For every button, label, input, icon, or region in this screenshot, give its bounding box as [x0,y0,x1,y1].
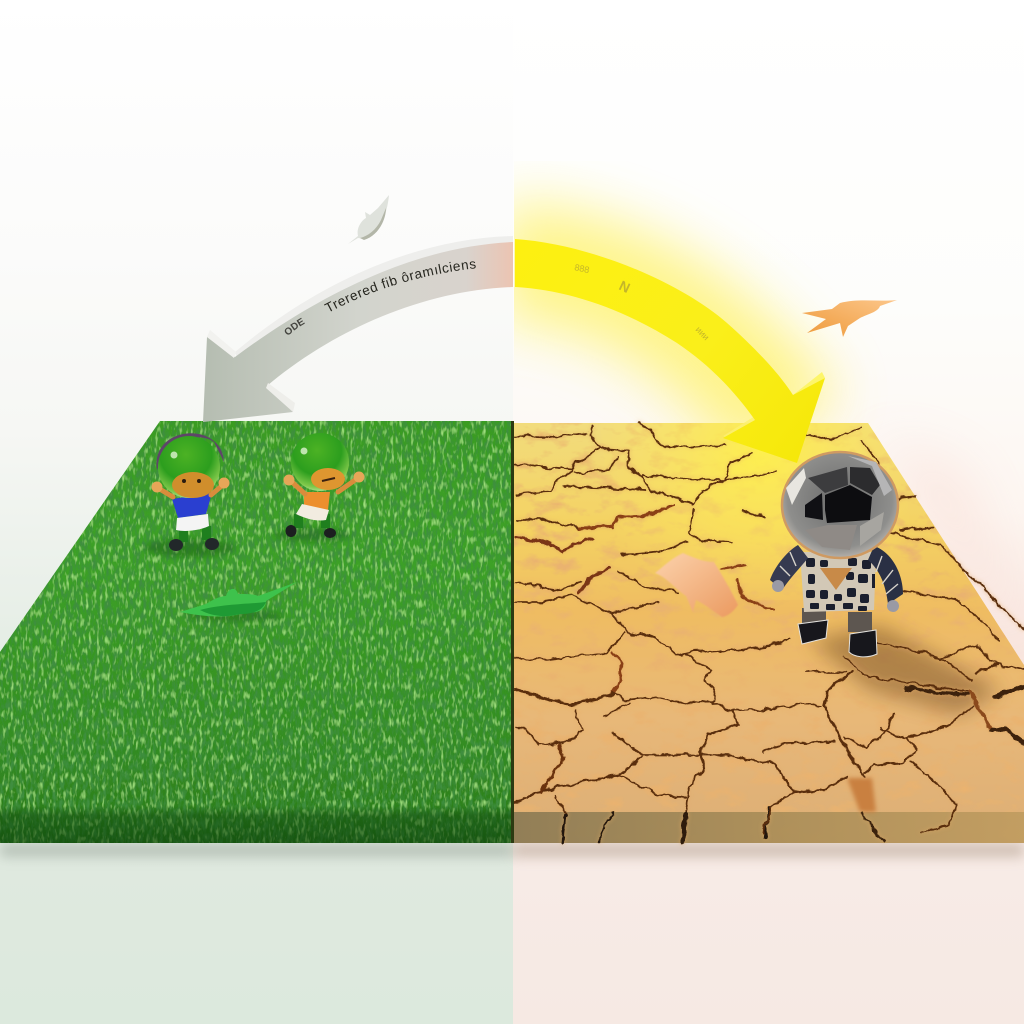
arrow faint labels: ᴎᴎᴎ [694,324,711,342]
robot shadow [810,625,1000,715]
arrow small icon label: ODE [284,318,305,335]
icon: white dolphin [348,195,389,244]
arrow: gray reversing arrow [203,236,513,422]
panel: cracked dry earth [514,423,1024,843]
character: chrome soccer-helmet astronaut [770,452,903,657]
character: green helmet kid in orange shirt [284,433,364,538]
character: green helmet kid in blue shirt [152,433,230,551]
torso [800,552,876,612]
crack network [515,423,1024,843]
panel: lush grass [0,421,512,843]
arrow faint labels: 888 [574,262,590,275]
center divider [511,421,514,843]
slab shadow [0,843,1024,857]
arrow faint labels: N [617,277,633,296]
arms [770,545,808,590]
icon: green lizard [180,582,297,616]
arrow faint labels [574,262,711,342]
chrome helmet [782,452,898,558]
arrow text: Trerered fib ôramılciens [324,261,476,312]
icon: orange pig-like creature [655,553,738,617]
legs and shoes [169,526,219,551]
arrow: yellow heating arrow [515,239,825,463]
legs and boots [798,608,877,657]
icon: orange bird [802,300,897,337]
orange gash [847,778,876,812]
